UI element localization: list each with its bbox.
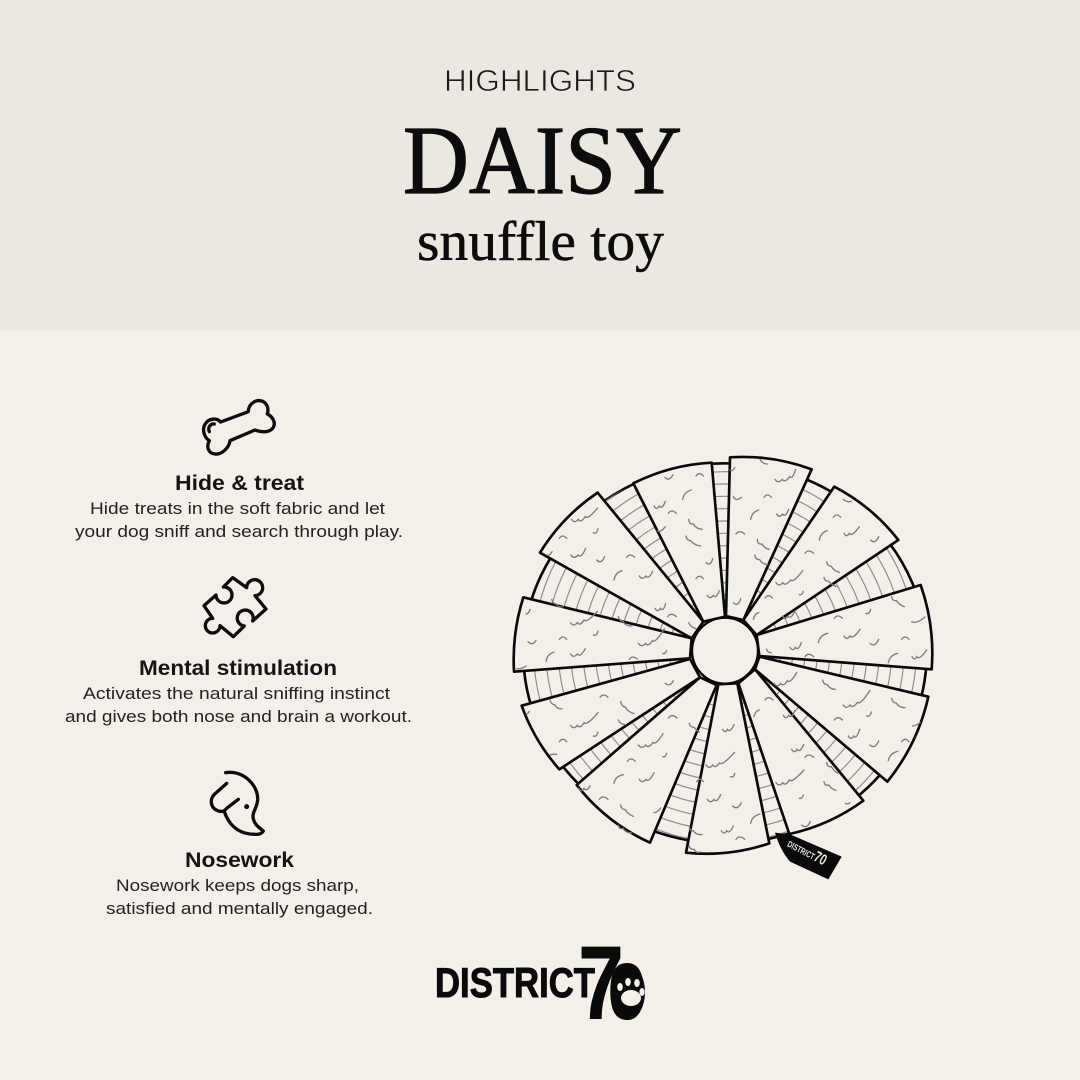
text: hide and treat description: your dog sniff and search through play. bbox=[75, 522, 403, 541]
toy base disc with concentric stripes bbox=[523, 459, 927, 843]
icon: dog head bbox=[210, 770, 266, 836]
fabric tag with logo bbox=[775, 833, 842, 879]
text: mental stimulation description: Activates the natural sniffing instinct bbox=[83, 684, 390, 703]
heading: nosework: Nosework bbox=[185, 849, 294, 872]
icon: bone bbox=[202, 398, 276, 456]
center hub bbox=[692, 618, 758, 684]
petals bbox=[514, 457, 932, 854]
feature: mental stimulation bbox=[65, 578, 412, 726]
heading: hide and treat: Hide & treat bbox=[175, 472, 304, 495]
text: hide and treat description: Hide treats in the soft fabric and let bbox=[90, 499, 385, 518]
illustration: daisy snuffle toy bbox=[512, 456, 934, 880]
feature: hide and treat bbox=[75, 401, 403, 541]
logo numeral seven: 7 bbox=[578, 925, 624, 1042]
header band bbox=[0, 0, 1080, 330]
text: nosework description bbox=[106, 876, 373, 918]
text: hide and treat description bbox=[75, 499, 403, 541]
icon: puzzle piece bbox=[202, 576, 268, 638]
subtitle: snuffle toy: snuffle toy bbox=[417, 211, 664, 273]
fabric squiggle texture bbox=[517, 459, 927, 852]
heading: mental stimulation: Mental stimulation bbox=[139, 657, 337, 680]
title: daisy: DAISY bbox=[403, 107, 682, 214]
feature: nosework bbox=[106, 772, 373, 918]
logo numeral zero with paw: 0 bbox=[609, 950, 645, 1035]
logo: district 70 bbox=[435, 925, 645, 1042]
text: nosework description: satisfied and mentally engaged. bbox=[106, 899, 373, 918]
eyebrow heading: highlights: HIGHLIGHTS bbox=[444, 63, 636, 98]
logo wordmark: DISTRICT bbox=[435, 959, 595, 1006]
text: mental stimulation description bbox=[65, 684, 412, 726]
fabric tag with logo: DISTRICT70 bbox=[785, 835, 830, 869]
text: nosework description: Nosework keeps dogs sharp, bbox=[116, 876, 359, 895]
text: mental stimulation description: and gives both nose and brain a workout. bbox=[65, 707, 412, 726]
